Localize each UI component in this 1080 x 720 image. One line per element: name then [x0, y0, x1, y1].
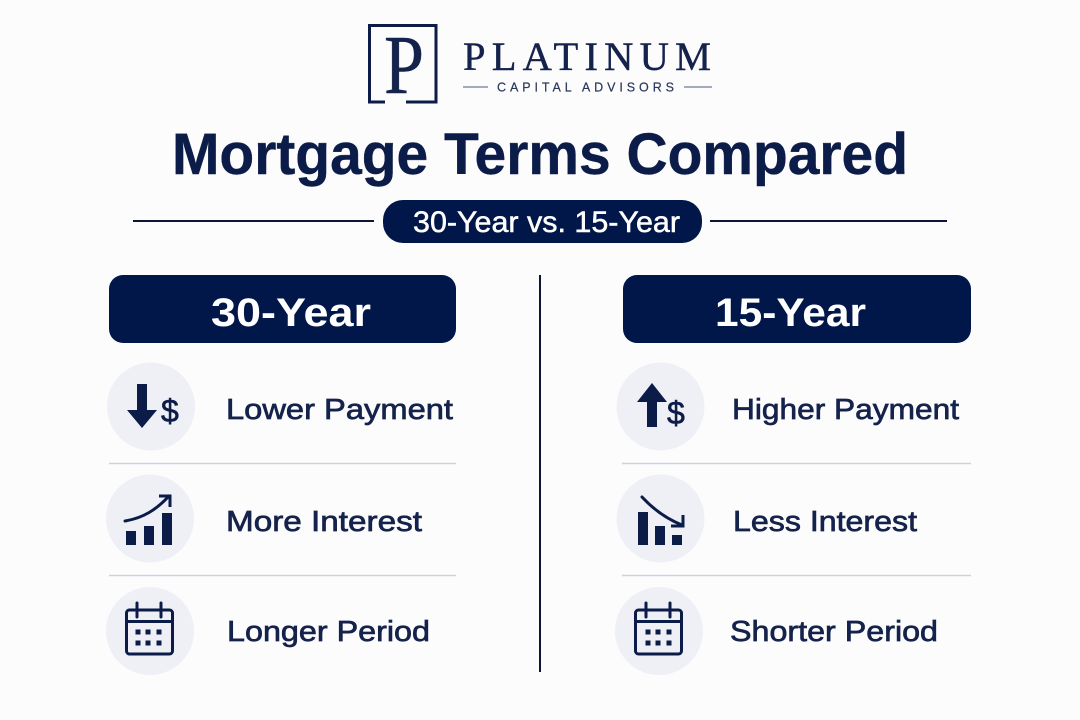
row dividers: [109, 462, 971, 464]
15-year header: 15-Year: [715, 291, 866, 335]
icon: calendar: [106, 587, 194, 675]
title: Mortgage Terms Compared: [172, 122, 908, 187]
label: longer period: Longer Period: [227, 616, 430, 648]
subtitle pill: 30-Year vs. 15-Year: [413, 206, 680, 239]
icon: arrow up and dollar: $: [667, 395, 685, 431]
30-year header: [109, 275, 456, 343]
icon: falling bar chart: [616, 474, 704, 562]
logo mark: P: [384, 19, 424, 112]
label: less interest: Less Interest: [733, 506, 917, 538]
label: shorter period: Shorter Period: [730, 616, 938, 648]
subtitle rules: [133, 220, 947, 222]
icon: rising bar chart: [106, 474, 194, 562]
icon: calendar: [615, 587, 703, 675]
logo wordmark: PLATINUM: [463, 34, 711, 79]
label: more interest: More Interest: [226, 506, 422, 538]
icon: arrow down and dollar: $: [161, 393, 179, 429]
30-year header: 30-Year: [211, 291, 371, 335]
logo: [370, 19, 712, 112]
panel: 15-year: [615, 275, 971, 675]
icon: arrow up and dollar: [616, 362, 704, 450]
label: higher payment: Higher Payment: [732, 394, 959, 426]
15-year header: [623, 275, 971, 343]
icon: arrow down and dollar: [107, 362, 195, 450]
row dividers lower: [109, 574, 971, 576]
logo tagline: CAPITAL ADVISORS: [497, 80, 674, 94]
subtitle pill: [383, 200, 702, 243]
label: lower payment: Lower Payment: [226, 394, 453, 426]
centre divider: [539, 275, 541, 672]
panel: 30-year: [106, 275, 456, 675]
